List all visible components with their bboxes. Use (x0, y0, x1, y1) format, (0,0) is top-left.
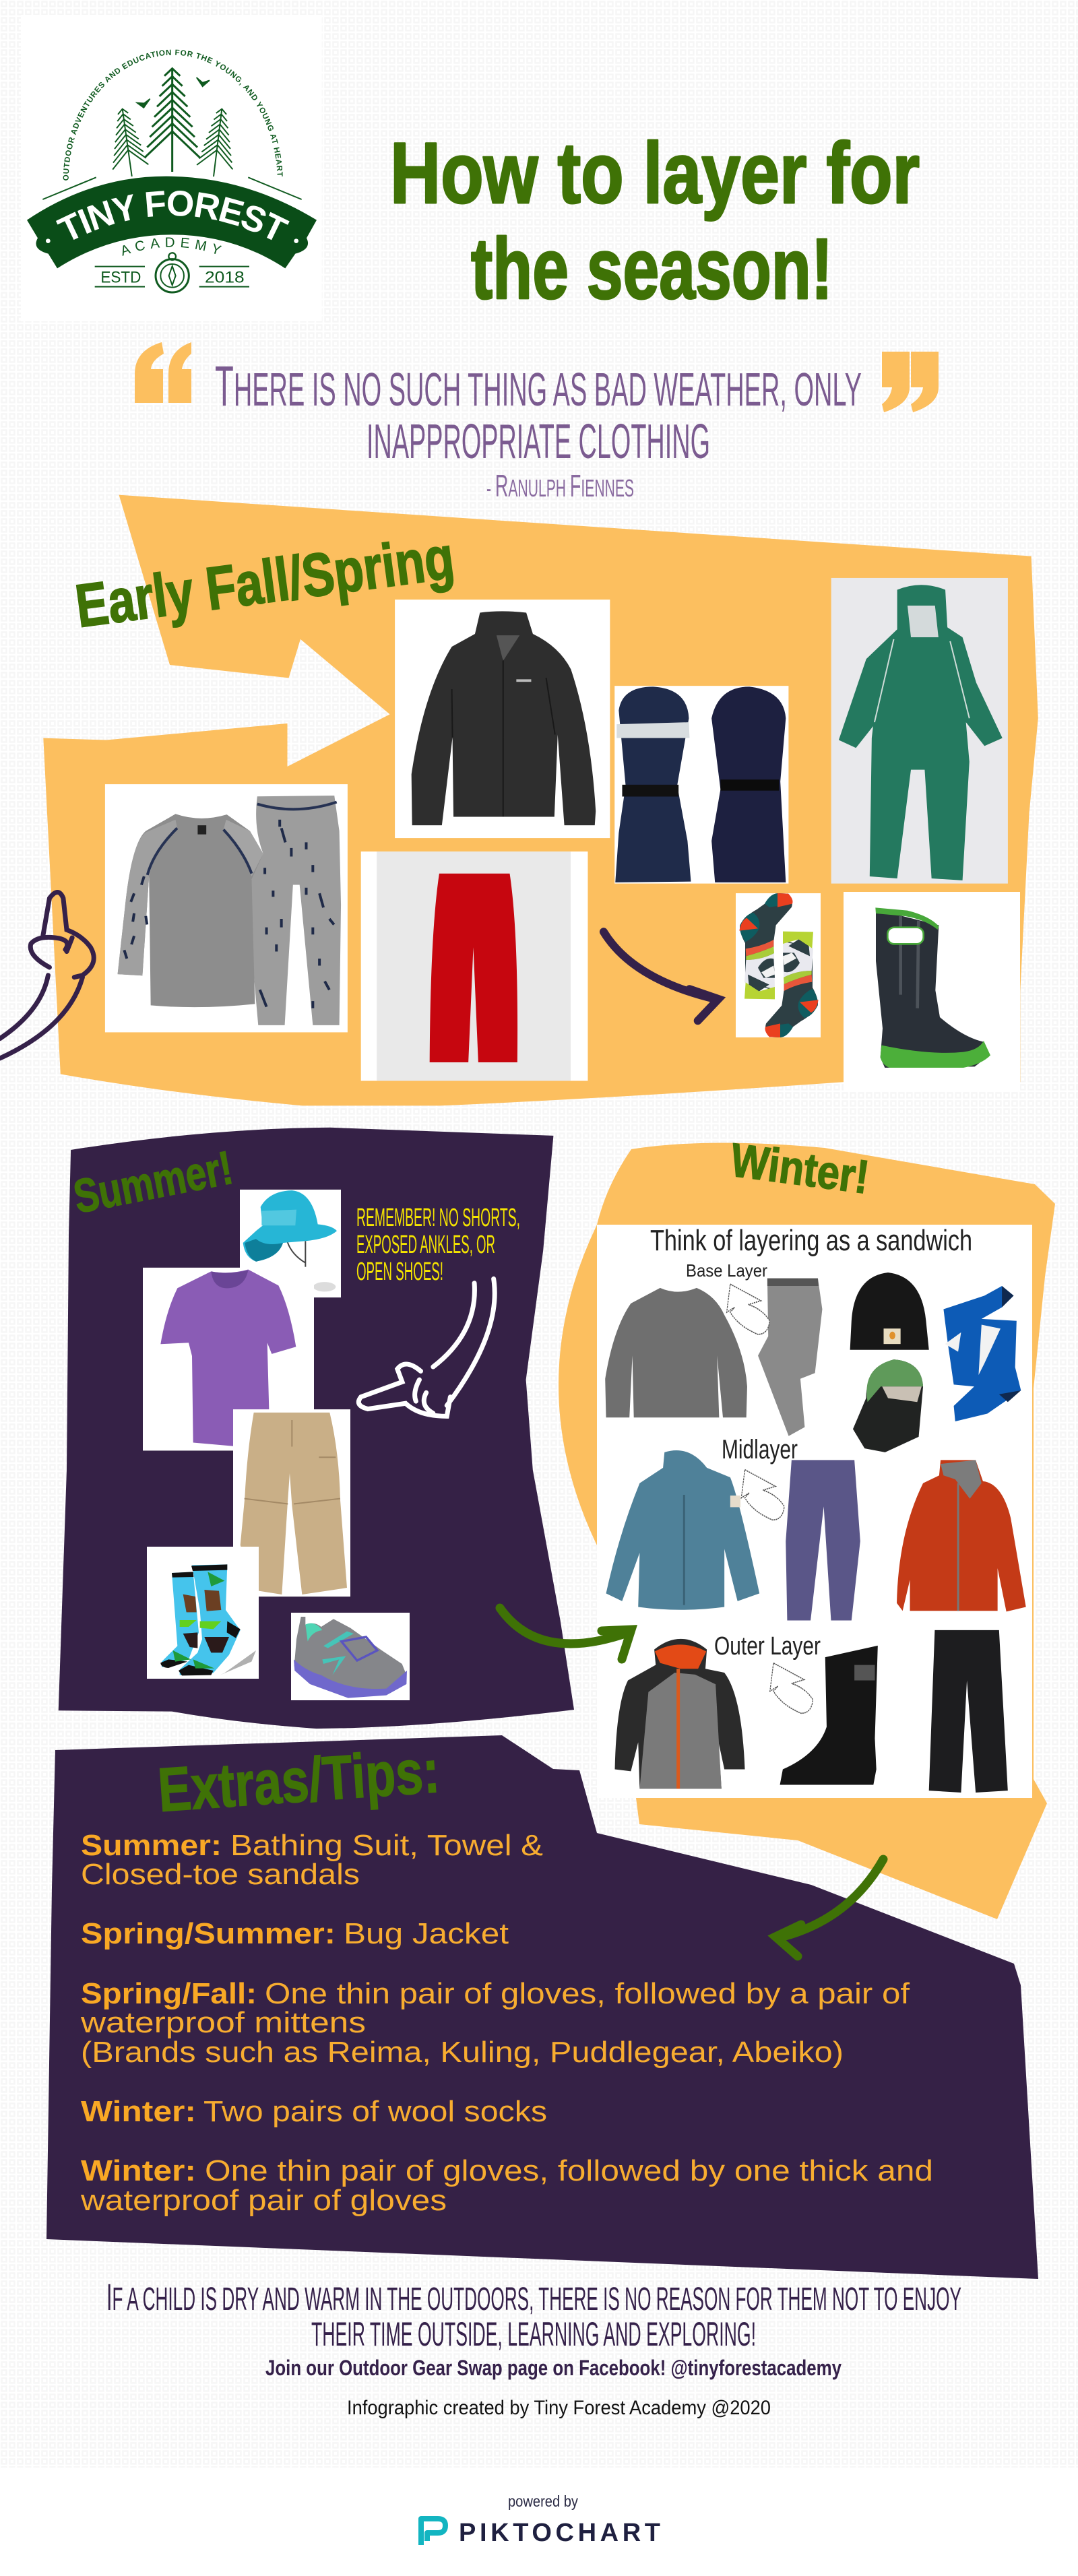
chart labels: Think of layering as a sandwich (650, 1224, 972, 1257)
logo: Tiny Forest Academy: ESTD (100, 268, 141, 286)
tip: spring/summer (81, 1917, 509, 1950)
title: the season! (471, 221, 833, 317)
rain suit (831, 578, 1008, 884)
reminder note: EXPOSED ANKLES, OR (356, 1231, 495, 1259)
tip: winter gloves: One thin pair of gloves, followed by one thick and (205, 2154, 933, 2187)
quote mark: closing (882, 352, 939, 412)
wool socks (736, 893, 821, 1037)
arrow: outer layer (770, 1663, 813, 1713)
sun hat (240, 1190, 341, 1297)
novelty socks (147, 1547, 259, 1679)
wool socks, blue (943, 1286, 1021, 1421)
quotation text: INAPPROPRIATE CLOTHING (367, 415, 710, 469)
tip: winter socks: Two pairs of wool socks (203, 2095, 547, 2128)
closing statement (106, 2276, 961, 2353)
panel shape (43, 495, 1038, 1105)
fleece jacket (395, 600, 610, 838)
chart labels: Base Layer (686, 1260, 767, 1281)
logo: Tiny Forest Academy: 2018 (205, 268, 245, 286)
chart labels: Midlayer (722, 1435, 798, 1464)
puffer jacket (615, 1639, 745, 1789)
facebook call to action: Join our Outdoor Gear Swap page on Facebook! @tinyforestacademy (265, 2356, 842, 2380)
panel shape (59, 1128, 574, 1729)
footer: powered by Piktochart: powered by (508, 2492, 578, 2510)
tip: winter gloves: Winter: (81, 2154, 196, 2187)
snow pants (929, 1630, 1008, 1793)
logo: Tiny Forest Academy: OUTDOOR ADVENTURES AND EDUCATION FOR THE YOUNG, AND YOUNG AT HEART (63, 50, 283, 181)
tip: spring/fall: (Brands such as Reima, Kuling, Puddlegear, Abeiko) (81, 2036, 844, 2069)
panel: summer (59, 1128, 574, 1729)
panel shape (559, 1142, 1055, 1919)
base layer sweater (605, 1288, 747, 1417)
logo: Tiny Forest Academy: ACADEMY (123, 237, 222, 256)
tip: winter gloves (80, 2154, 933, 2217)
midlayer fleece (606, 1450, 759, 1610)
item boxes and garments (0, 578, 1008, 1081)
quote block (135, 342, 939, 503)
zip-off pants (233, 1409, 350, 1597)
panel: early fall / spring (0, 495, 1038, 1105)
heading: Extras/Tips: Extras/Tips: (156, 1737, 441, 1825)
base layer top and leggings (105, 784, 348, 1032)
heading: Early Fall/Spring: Early Fall/Spring (72, 524, 458, 641)
logo: Tiny Forest Academy (21, 15, 322, 321)
panel: winter (559, 1134, 1055, 1919)
rain mittens (614, 686, 788, 884)
footer: powered by Piktochart: PIKTOCHART (459, 2519, 660, 2547)
heading: Winter!: Winter! (728, 1134, 872, 1204)
icon: Piktochart mark (421, 2519, 445, 2545)
reminder note: REMEMBER! NO SHORTS, (356, 1204, 520, 1232)
reminder note (356, 1204, 520, 1286)
tip: winter gloves: waterproof pair of gloves (80, 2184, 447, 2217)
hand pointing to the text (358, 1279, 495, 1416)
tip: spring/fall: waterproof mittens (80, 2006, 366, 2039)
layering sandwich chart (597, 1224, 1032, 1798)
arrow: purple (604, 932, 718, 1021)
winter boot (780, 1646, 878, 1784)
tip: winter socks (81, 2095, 547, 2128)
tip: summer: Summer: (81, 1829, 222, 1862)
tip: summer (81, 1829, 543, 1891)
tip: spring/fall (80, 1977, 910, 2069)
title: How to layer for (390, 125, 920, 222)
tip: summer: Closed-toe sandals (81, 1858, 360, 1891)
heading: Summer!: Summer! (69, 1141, 236, 1223)
sneaker (291, 1613, 410, 1700)
purple t-shirt (143, 1268, 314, 1450)
quote mark: opening (135, 342, 191, 403)
red fleece jacket (897, 1460, 1026, 1611)
chart labels: Outer Layer (714, 1632, 821, 1661)
tip: winter socks: Winter: (81, 2095, 196, 2128)
panel shape (46, 1735, 1038, 2279)
midlayer pants (786, 1460, 860, 1621)
arrow: summer to winter (500, 1608, 631, 1659)
beanie (850, 1273, 929, 1350)
tip: spring/summer: Spring/Summer: (81, 1917, 336, 1950)
arrow: winter to extras (775, 1859, 883, 1956)
attribution: - RANULPH FIENNES (486, 468, 634, 503)
rain boot (844, 892, 1020, 1091)
logo: Tiny Forest Academy: TINY FOREST (56, 191, 290, 240)
arrow: midlayer (741, 1470, 784, 1520)
base layer leggings (758, 1279, 822, 1436)
reminder note: OPEN SHOES! (356, 1258, 443, 1286)
red fleece pants (361, 851, 588, 1081)
title (390, 125, 920, 317)
quotation text (215, 354, 862, 469)
tip: summer: Bathing Suit, Towel & (230, 1829, 543, 1862)
hand pointing up (0, 893, 94, 1058)
footer: powered by Piktochart (421, 2492, 660, 2547)
chart labels (650, 1224, 972, 1661)
tip: spring/fall: One thin pair of gloves, followed by a pair of (265, 1977, 910, 2010)
arrow: base layer (727, 1284, 769, 1334)
tip: spring/summer: Bug Jacket (344, 1917, 509, 1950)
panel: extras and tips (46, 1735, 1038, 2279)
balaclava (853, 1359, 923, 1452)
credit: Infographic created by Tiny Forest Academy @2020 (347, 2397, 771, 2419)
tip: spring/fall: Spring/Fall: (81, 1977, 257, 2010)
